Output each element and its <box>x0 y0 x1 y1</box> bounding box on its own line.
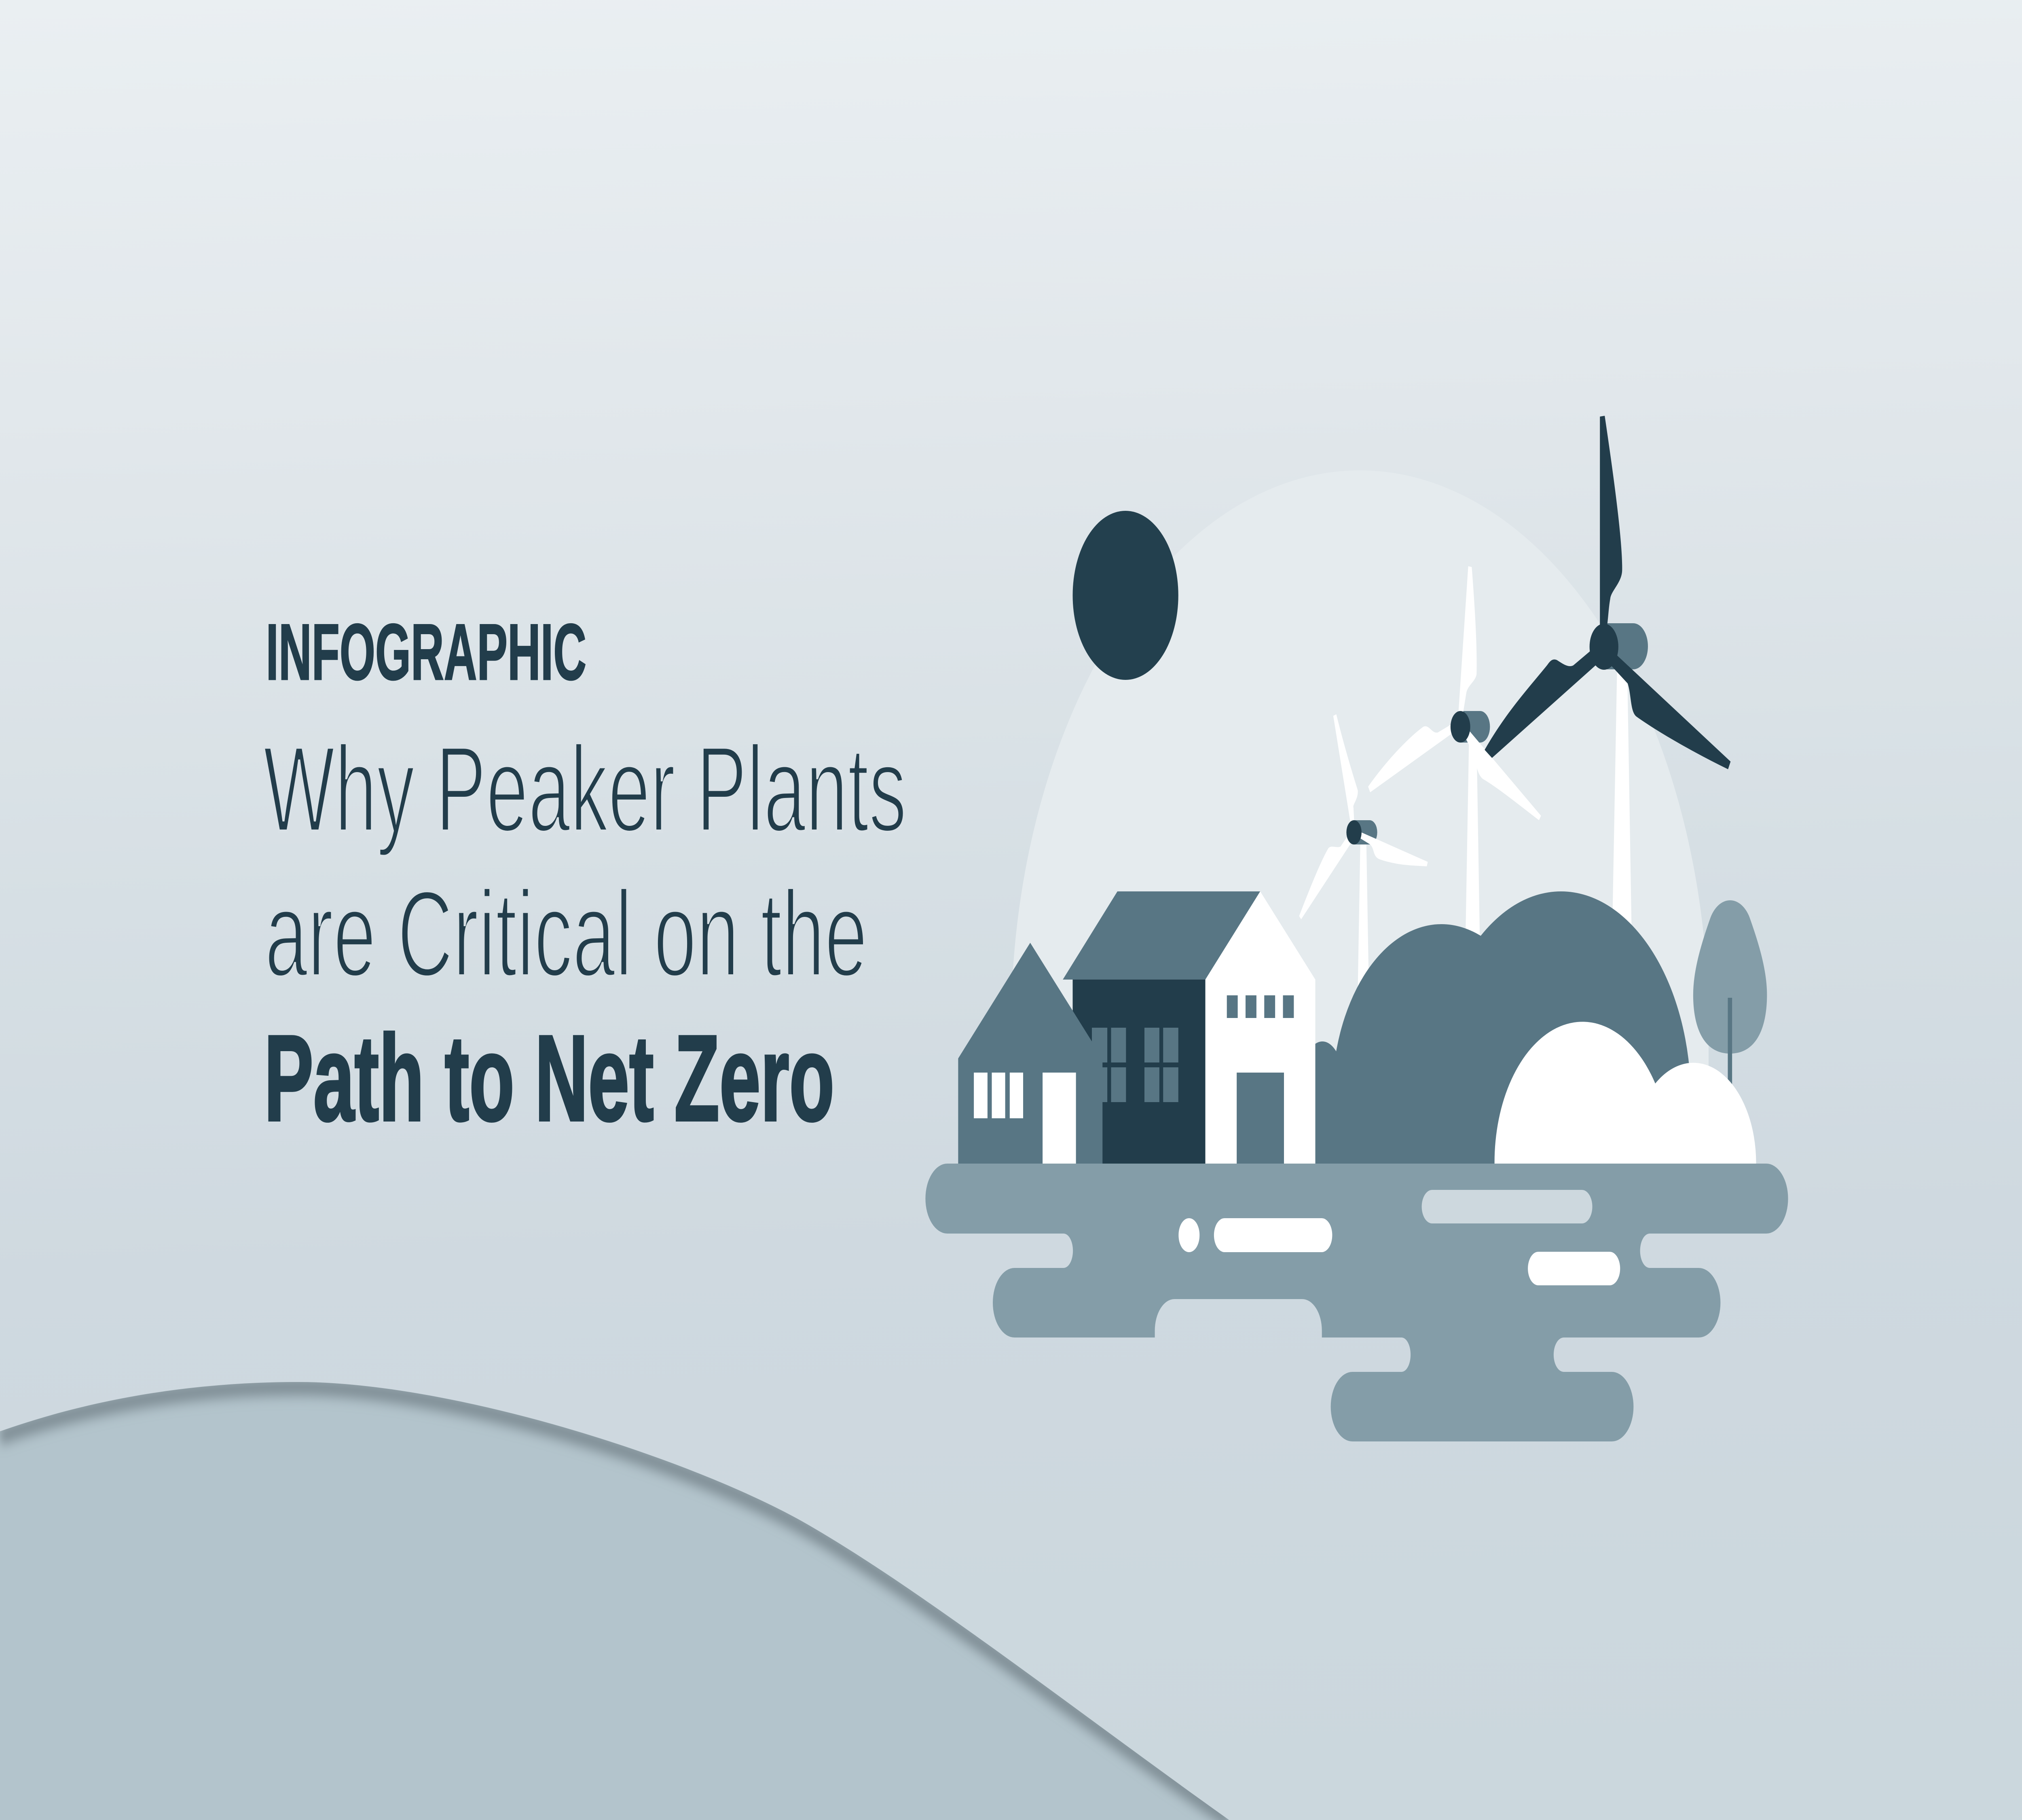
eyebrow: INFOGRAPHIC: INFOGRAPHIC <box>266 607 586 696</box>
title block <box>263 607 907 1147</box>
tree <box>1693 900 1767 1103</box>
dark centre house <box>1063 891 1260 1164</box>
water ripple dot <box>1178 1218 1199 1252</box>
water ripple white right <box>1528 1252 1620 1285</box>
title line 3 bold: Path to Net Zero <box>264 1010 834 1147</box>
medium wind turbine <box>1368 566 1541 942</box>
left house <box>958 943 1102 1164</box>
small wind turbine <box>1299 714 1428 1019</box>
water ripple pale <box>1422 1190 1593 1223</box>
title line 2: are Critical on the <box>265 866 867 1002</box>
title line 1: Why Peaker Plants <box>263 721 907 857</box>
illustration: wind farm and houses <box>925 416 1788 1441</box>
large wind turbine <box>1485 416 1730 971</box>
pale backdrop circle <box>1011 470 1709 1164</box>
dark bushes behind <box>1315 891 1689 1164</box>
floating ground island <box>925 1164 1788 1441</box>
water ripple white <box>1214 1218 1332 1252</box>
icon: sun <box>1072 511 1178 680</box>
white bushes front <box>1495 1022 1756 1164</box>
white gabled house <box>1206 891 1315 1164</box>
wave at bottom left <box>0 1382 1229 1820</box>
